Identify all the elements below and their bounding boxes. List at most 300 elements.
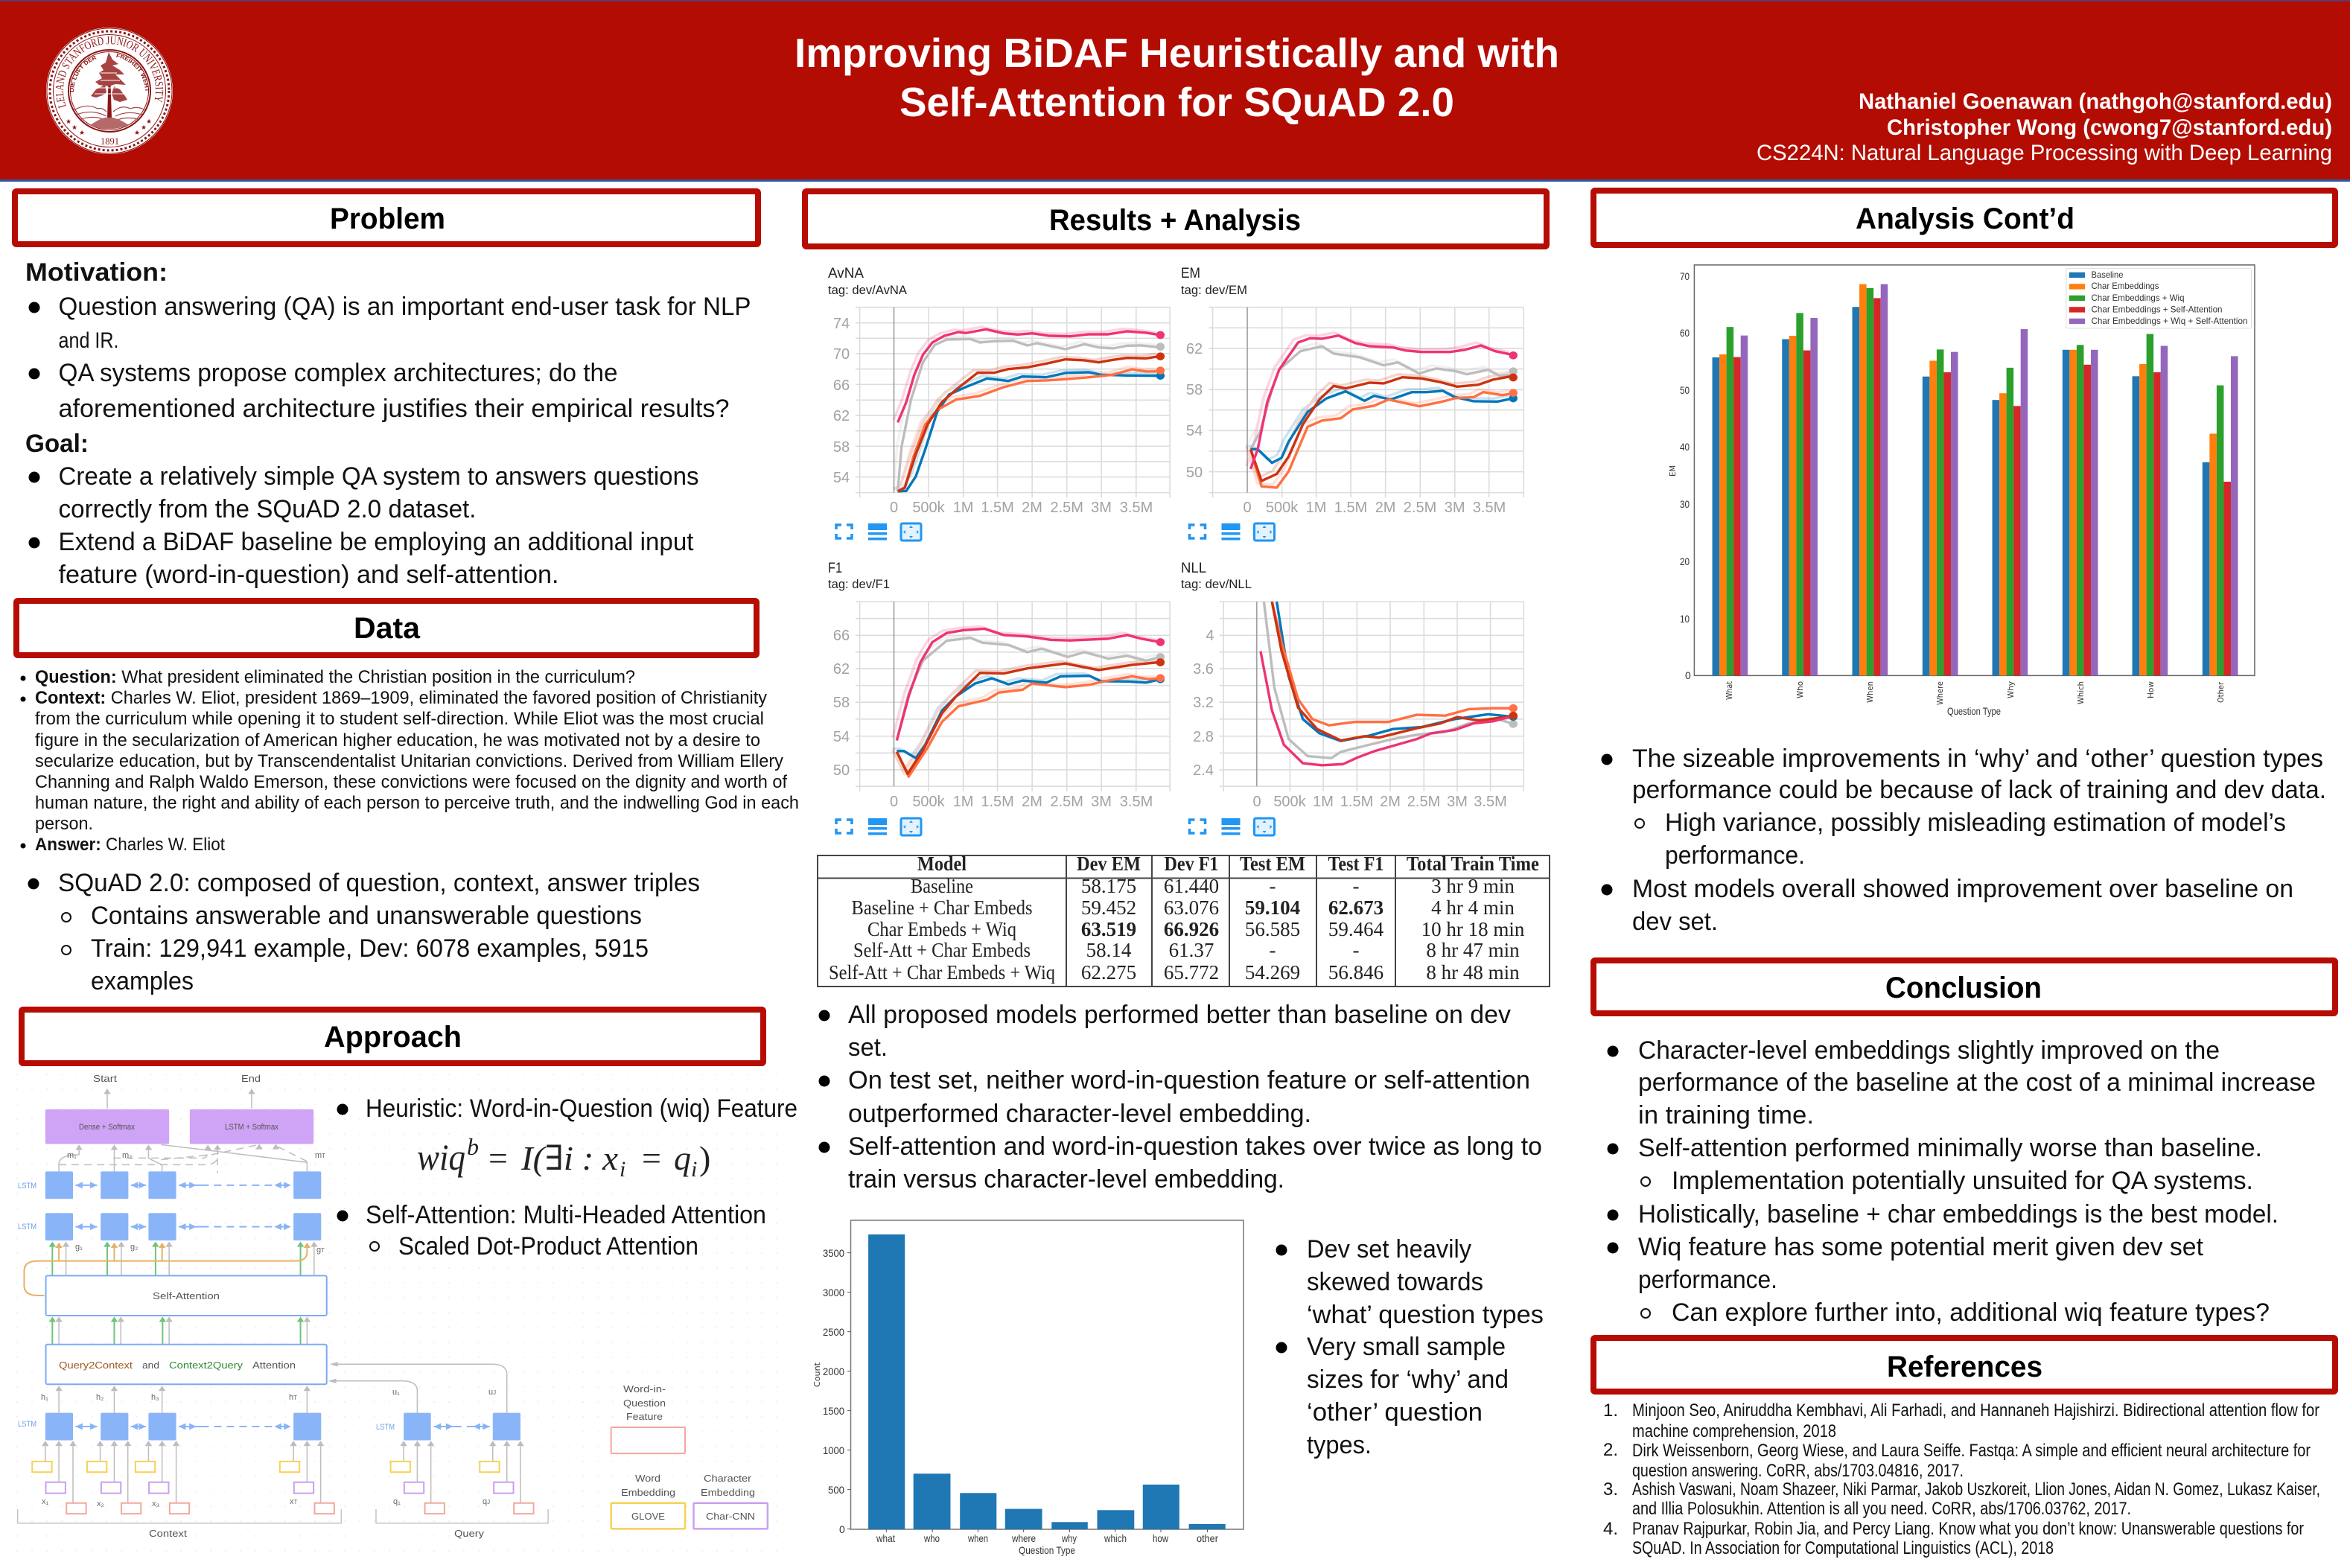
grouped bar chart: EM by question type: 10 — [1680, 613, 1690, 625]
diagram labels: h₃ — [151, 1393, 159, 1402]
text: conclusion bullets: performance. — [1638, 1266, 1777, 1294]
table: model results: Dev F1 — [1165, 852, 1218, 875]
bar chart: question type counts: 1500 — [823, 1405, 844, 1417]
panel: results and analysis — [805, 191, 1550, 1556]
bar chart: question type counts: who — [923, 1532, 940, 1544]
text: SQuAD description — [28, 869, 700, 995]
table: model results: Total Train Time — [1407, 852, 1539, 875]
diagram labels: uJ — [488, 1388, 496, 1397]
grouped bar chart: EM by question type: Where — [1935, 681, 1945, 705]
diagram labels: m₁ — [67, 1151, 77, 1160]
text: example question context answer: figure in the secularization of American higher education, he was motivated not by a desire to — [35, 730, 760, 750]
line chart: EM: 3.5M — [1473, 500, 1506, 516]
diagram labels: hT — [289, 1393, 297, 1402]
text: analysis bullets: The sizeable improvements in ‘why’ and ‘other’ question types — [1632, 745, 2323, 773]
text: results bullets: set. — [848, 1033, 888, 1062]
text: example question context answer: human nature, the right and ability of each person to perceive truth, and the indwelling God in each — [35, 793, 799, 813]
diagram labels: q₁ — [393, 1497, 401, 1506]
heading: Results + Analysis: Results + Analysis — [1049, 204, 1301, 237]
icon: Stanford seal: ★ — [134, 129, 140, 136]
text: analysis bullets: dev set. — [1632, 908, 1718, 936]
title — [795, 30, 1559, 125]
line chart: EM: 50 — [1186, 465, 1203, 481]
line chart: NLL: 1.5M — [1340, 794, 1373, 810]
diagram labels: LSTM — [18, 1223, 36, 1231]
diagram labels: x₂ — [97, 1500, 104, 1508]
diagram labels: Question — [623, 1398, 666, 1409]
diagram labels: u₁ — [392, 1388, 400, 1397]
heading: Conclusion: Conclusion — [1885, 972, 2042, 1004]
line chart: F1: 1.5M — [981, 794, 1014, 810]
icons: F1 chart controls — [836, 818, 921, 835]
line chart: F1: 1M — [953, 794, 973, 810]
table: model results: - — [1269, 939, 1276, 961]
icon: Stanford seal: LELAND STANFORD JUNIOR UNIVERSITY — [55, 36, 164, 109]
text: reference list: SQuAD. In Association for Computational Linguistics (ACL), 2018 — [1632, 1538, 2054, 1558]
diagram labels: g₂ — [130, 1243, 138, 1252]
diagram labels: Embedding — [621, 1487, 675, 1498]
table: model results: 59.104 — [1245, 896, 1300, 919]
diagram labels: LSTM + Softmax — [225, 1123, 278, 1132]
table: model results: Self-Att + Char Embeds — [853, 939, 1031, 961]
icon: Stanford seal: DIE LUFT DER — [70, 56, 97, 92]
line chart: EM: 1.5M — [1334, 500, 1367, 516]
text: conclusion bullets: in training time. — [1638, 1101, 1814, 1129]
line chart: F1: 66 — [833, 628, 850, 644]
line chart: AvNA: 66 — [833, 377, 850, 394]
text: conclusion bullets: performance of the baseline at the cost of a minimal increase — [1638, 1068, 2316, 1097]
icons: AvNA chart controls — [836, 523, 921, 541]
text: motivation and goal: correctly from the SQuAD 2.0 dataset. — [58, 495, 477, 523]
table: model results: - — [1269, 875, 1276, 897]
line chart: NLL: 3.2 — [1193, 695, 1214, 711]
heading: Approach — [22, 1010, 763, 1063]
panel: data — [16, 601, 799, 995]
panel: analysis continued — [1593, 191, 2335, 936]
grouped bar chart: EM by question type: 30 — [1680, 498, 1690, 510]
bar chart: question type counts: 3500 — [823, 1247, 844, 1259]
formula: word in question — [417, 1133, 710, 1182]
bar chart: question type counts: what — [876, 1532, 895, 1544]
line chart: F1: 2M — [1022, 794, 1042, 810]
diagram labels: Context2Query — [169, 1360, 243, 1371]
line chart: NLL: 3.5M — [1474, 794, 1507, 810]
line chart: F1: 3M — [1091, 794, 1112, 810]
table: model results: 66.926 — [1164, 918, 1219, 940]
text: motivation and goal: QA systems propose complex architectures; do the — [58, 359, 618, 387]
diagram labels: Dense + Softmax — [79, 1123, 135, 1132]
line chart: AvNA: 70 — [833, 346, 850, 363]
diagram labels: Attention — [252, 1360, 296, 1371]
diagram labels: g₁ — [75, 1243, 83, 1252]
line chart: AvNA: 3.5M — [1120, 500, 1153, 516]
line chart: NLL: NLL — [1181, 561, 1206, 576]
bar chart: question type counts: where — [1011, 1532, 1036, 1544]
bar chart: question type counts: how — [1153, 1532, 1169, 1544]
formula: word in question: wiq — [417, 1136, 465, 1178]
text: motivation and goal: Extend a BiDAF baseline be employing an additional input — [58, 528, 694, 556]
text: conclusion bullets: Character-level embeddings slightly improved on the — [1638, 1036, 2220, 1065]
line chart: NLL: 4 — [1206, 628, 1214, 644]
line chart: F1: 50 — [833, 762, 850, 779]
text: reference list: and Illia Polosukhin. Attention is all you need. CoRR, abs/1706.03762, 2017. — [1632, 1499, 2131, 1519]
formula: word in question: I(∃i : x — [520, 1139, 619, 1177]
icon: Stanford seal: ★ — [146, 118, 152, 125]
text: dev set bullets: Very small sample — [1307, 1333, 1506, 1361]
line chart: EM: 500k — [1266, 500, 1299, 516]
text: conclusion bullets — [1607, 1036, 2316, 1327]
table: model results: 8 hr 48 min — [1426, 961, 1520, 984]
table: model results: 8 hr 47 min — [1426, 939, 1520, 961]
table: model results: Self-Att + Char Embeds + Wiq — [829, 961, 1055, 984]
text: SQuAD description: Train: 129,941 example, Dev: 6078 examples, 5915 — [91, 934, 649, 963]
text: motivation and goal — [25, 258, 751, 589]
line chart: EM: tag: dev/EM — [1181, 283, 1247, 297]
line chart: F1: 0 — [890, 794, 898, 810]
diagram labels: LSTM — [18, 1420, 36, 1429]
table: model results: 58.175 — [1081, 875, 1136, 897]
text: example question context answer: Channing and Ralph Waldo Emerson, these convictions were focused on the dignity and worth of — [35, 772, 787, 792]
formula: word in question: q — [674, 1139, 691, 1177]
diagram labels: and — [142, 1360, 159, 1371]
formula: word in question: i — [620, 1157, 625, 1182]
table: model results: - — [1352, 875, 1360, 897]
diagram labels: Self-Attention — [153, 1290, 220, 1301]
diagram labels: xT — [290, 1497, 298, 1506]
line chart: AvNA: 58 — [833, 439, 850, 456]
table: model results: 62.275 — [1081, 961, 1136, 984]
bar chart: question type counts — [812, 1220, 1244, 1556]
diagram labels: End — [241, 1073, 261, 1084]
text: results bullets: On test set, neither word-in-question feature or self-attention — [848, 1066, 1530, 1094]
formula: word in question: = — [488, 1139, 508, 1177]
text: example question context answer: secularize education, but by Transcendentalist Unitarian convictions. Derived from William Ellery — [35, 751, 783, 771]
table: model results: 4 hr 4 min — [1431, 896, 1515, 919]
bar chart: question type counts: 2500 — [823, 1326, 844, 1338]
diagram labels: Word — [635, 1473, 660, 1484]
icons: NLL chart controls — [1190, 818, 1275, 835]
icon: Stanford seal: ★ — [66, 118, 71, 125]
text: motivation and goal: Goal: — [25, 430, 89, 458]
text: conclusion bullets: Holistically, baseline + char embeddings is the best model. — [1638, 1200, 2279, 1228]
grouped bar chart: EM by question type: Char Embeddings — [2091, 281, 2159, 291]
table: model results: 62.673 — [1328, 896, 1383, 919]
grouped bar chart: EM by question type: Other — [2216, 682, 2226, 703]
bar chart: question type counts: when — [967, 1532, 988, 1544]
heading: Problem: Problem — [330, 203, 445, 235]
text: reference list: 2. — [1603, 1440, 1618, 1460]
table: model results: 59.452 — [1081, 896, 1136, 919]
title: Self-Attention for SQuAD 2.0 — [899, 79, 1454, 125]
panel: problem — [15, 191, 758, 589]
text: dev set bullets: Dev set heavily — [1307, 1235, 1471, 1263]
table: model results: Test EM — [1240, 852, 1305, 875]
grouped bar chart: EM by question type: Which — [2076, 681, 2086, 704]
diagram labels: gT — [316, 1246, 325, 1255]
text: self-attention bullets: Scaled Dot-Product Attention — [398, 1232, 698, 1261]
text: example question context answer: Answer: Charles W. Eliot — [35, 835, 225, 855]
table: model results: 63.519 — [1081, 918, 1136, 940]
heading: Analysis Cont'd — [1593, 191, 2335, 245]
diagram labels: x₁ — [42, 1497, 49, 1506]
icon: Stanford seal — [46, 28, 173, 154]
grouped bar chart: EM by question type: 60 — [1680, 327, 1690, 339]
text: dev set bullets — [1276, 1235, 1544, 1459]
text: analysis bullets — [1601, 745, 2326, 936]
grouped bar chart: EM by question type: Why — [2006, 681, 2016, 698]
line chart: AvNA: 3M — [1091, 500, 1112, 516]
line chart: AvNA: 2M — [1022, 500, 1042, 516]
line chart: EM: 54 — [1186, 423, 1203, 439]
line chart: F1: 62 — [833, 661, 850, 678]
text: results bullets: Self-attention and word-in-question takes over twice as long to — [848, 1132, 1542, 1161]
heading: Conclusion — [1593, 960, 2335, 1013]
bar chart: question type counts: Count — [812, 1362, 822, 1387]
table: model results: 63.076 — [1164, 896, 1219, 919]
icon: Stanford seal: ★ — [71, 124, 77, 131]
text: reference list: 4. — [1603, 1519, 1618, 1539]
line chart: NLL: 2.8 — [1193, 729, 1214, 745]
diagram labels: Query2Context — [59, 1360, 133, 1371]
line chart: NLL: tag: dev/NLL — [1181, 577, 1252, 591]
bar chart: question type counts: 3000 — [823, 1287, 844, 1298]
grouped bar chart: EM by question type: Char Embeddings + Self-Attention — [2091, 304, 2222, 314]
text: example question context answer: Question: What president eliminated the Christian position in the curriculum? — [35, 667, 635, 687]
formula: word in question: b — [467, 1133, 479, 1160]
icon: Stanford seal: 1891 — [101, 136, 119, 147]
line chart: NLL: 0 — [1252, 794, 1261, 810]
diagram labels: m₂ — [122, 1151, 132, 1160]
line chart: NLL: 500k — [1273, 794, 1307, 810]
text: reference list: question answering. CoRR, abs/1703.04816, 2017. — [1632, 1461, 1964, 1481]
grouped bar chart: EM by question type: Who — [1795, 681, 1805, 698]
line chart: EM: EM — [1181, 266, 1200, 281]
text: conclusion bullets: Wiq feature has some potential merit given dev set — [1638, 1233, 2204, 1261]
grouped bar chart: EM by question type: Baseline — [2091, 270, 2124, 280]
table: model results: 10 hr 18 min — [1421, 918, 1525, 940]
text: results bullets: train versus character-level embedding. — [848, 1165, 1284, 1193]
icons: EM chart controls — [1190, 523, 1275, 541]
panel: conclusion — [1593, 960, 2335, 1327]
heading: Data — [16, 601, 757, 655]
line chart: EM: 62 — [1186, 341, 1203, 357]
table: model results: Baseline + Char Embeds — [852, 896, 1032, 919]
text: conclusion bullets: Self-attention performed minimally worse than baseline. — [1638, 1134, 2262, 1162]
diagram labels: GLOVE — [631, 1511, 665, 1522]
diagram labels: Context — [149, 1528, 187, 1539]
diagram labels: x₃ — [152, 1500, 159, 1508]
heading: Data: Data — [354, 612, 421, 645]
diagram labels — [18, 1073, 755, 1539]
bar chart: question type counts: which — [1104, 1532, 1127, 1544]
text: motivation and goal: Motivation: — [25, 258, 168, 287]
text: results bullets: All proposed models performed better than baseline on dev — [848, 1001, 1511, 1029]
line chart: NLL: 2.4 — [1193, 762, 1214, 779]
line chart: AvNA: tag: dev/AvNA — [828, 283, 908, 297]
authors and course: Christopher Wong (cwong7@stanford.edu) — [1887, 115, 2332, 140]
diagram labels: h₁ — [41, 1393, 48, 1402]
table: model results: Dev EM — [1077, 852, 1141, 875]
line chart: F1: 58 — [833, 695, 850, 711]
heading: Results + Analysis — [805, 191, 1547, 246]
line chart: F1: 3.5M — [1120, 794, 1153, 810]
text: reference list — [1603, 1400, 2320, 1558]
bar chart: question type counts: 1000 — [823, 1444, 844, 1456]
authors and course: Nathaniel Goenawan (nathgoh@stanford.edu) — [1859, 89, 2332, 114]
line chart: EM — [1181, 266, 1523, 516]
text: motivation and goal: aforementioned architecture justifies their empirical results? — [58, 395, 730, 423]
line chart: AvNA: 0 — [890, 500, 898, 516]
grouped bar chart: EM by question type: Char Embeddings + Wiq + Self-Attention — [2091, 316, 2247, 326]
line chart: AvNA: 74 — [833, 316, 850, 332]
grouped bar chart: EM by question type — [1668, 265, 2255, 717]
text: results bullets — [819, 1001, 1542, 1193]
table: model results: 56.585 — [1245, 918, 1300, 940]
text: dev set bullets: ‘other’ question — [1307, 1398, 1483, 1427]
title: Improving BiDAF Heuristically and with — [795, 30, 1559, 76]
text: dev set bullets: sizes for ‘why’ and — [1307, 1365, 1509, 1394]
icon: Stanford seal: ★ — [79, 129, 85, 136]
text: conclusion bullets: Implementation potentially unsuited for QA systems. — [1672, 1167, 2253, 1195]
text: motivation and goal: feature (word-in-question) and self-attention. — [58, 561, 558, 589]
text: self-attention bullets — [337, 1201, 766, 1261]
heading: References — [1593, 1338, 2335, 1392]
authors and course: CS224N: Natural Language Processing with Deep Learning — [1757, 141, 2332, 165]
text: reference list: 3. — [1603, 1479, 1618, 1500]
table: model results: 61.440 — [1164, 875, 1219, 897]
line chart: EM: 2.5M — [1404, 500, 1436, 516]
diagram labels: Query — [454, 1528, 485, 1539]
bar chart: question type counts: Question Type — [1019, 1544, 1075, 1556]
text: motivation and goal: and IR. — [58, 328, 119, 353]
text: analysis bullets: Most models overall showed improvement over baseline on — [1632, 875, 2293, 903]
text: motivation and goal: Create a relatively simple QA system to answers questions — [58, 462, 698, 491]
formula: word in question: ) — [699, 1139, 710, 1177]
formula: word in question: i — [691, 1157, 697, 1182]
text: dev set bullets: skewed towards — [1307, 1268, 1483, 1296]
table: model results: 56.846 — [1328, 961, 1383, 984]
line chart: EM: 0 — [1243, 500, 1252, 516]
heading: Analysis Cont'd: Analysis Cont’d — [1856, 203, 2074, 235]
diagram labels: mT — [315, 1151, 325, 1160]
diagram labels: Feature — [626, 1411, 663, 1422]
architecture diagram — [18, 1073, 797, 1539]
table: model results: Model — [917, 852, 967, 875]
line chart: NLL: 2.5M — [1407, 794, 1440, 810]
line chart: NLL: 2M — [1380, 794, 1401, 810]
line chart: NLL — [1181, 561, 1523, 810]
diagram labels: Word-in- — [623, 1383, 666, 1395]
heading: References: References — [1887, 1351, 2042, 1383]
text: SQuAD description: SQuAD 2.0: composed of question, context, answer triples — [58, 869, 700, 897]
line chart: AvNA — [828, 266, 1170, 516]
text: SQuAD description: examples — [91, 967, 194, 995]
text: analysis bullets: performance could be because of lack of training and dev data. — [1632, 776, 2326, 804]
panel: references — [1593, 1338, 2335, 1558]
diagram labels: Embedding — [701, 1487, 755, 1498]
grouped bar chart: EM by question type: 70 — [1680, 270, 1690, 282]
grouped bar chart: EM by question type: 40 — [1680, 441, 1690, 453]
line chart: F1: 500k — [912, 794, 946, 810]
grouped bar chart: EM by question type: EM — [1668, 465, 1678, 477]
line chart: F1 — [828, 561, 1170, 810]
line chart: AvNA: 54 — [833, 470, 850, 486]
table: model results: 59.464 — [1328, 918, 1384, 940]
table: model results: Baseline — [911, 875, 973, 897]
line chart: EM: 2M — [1375, 500, 1395, 516]
line chart: EM: 1M — [1306, 500, 1326, 516]
text: example question context answer: from the curriculum while opening it to student self-direction. While Eliot was the most crucial — [35, 709, 764, 729]
diagram labels: h₂ — [96, 1393, 104, 1402]
line chart: AvNA: 1.5M — [981, 500, 1014, 516]
text: results bullets: outperformed character-level embedding. — [848, 1100, 1311, 1128]
line chart: F1: 2.5M — [1050, 794, 1083, 810]
grouped bar chart: EM by question type: Char Embeddings + Wiq — [2091, 293, 2185, 303]
line chart: EM: 3M — [1445, 500, 1465, 516]
line chart: AvNA: 500k — [912, 500, 946, 516]
grouped bar chart: EM by question type: What — [1725, 681, 1734, 700]
header banner — [0, 0, 2350, 182]
table: model results: 3 hr 9 min — [1431, 875, 1515, 897]
text: dev set bullets: types. — [1307, 1431, 1372, 1459]
icon: Stanford seal: FREIHEIT WEHT — [116, 54, 149, 92]
line chart: AvNA: 1M — [953, 500, 973, 516]
table: model results: Test F1 — [1328, 852, 1383, 875]
grouped bar chart: EM by question type: 0 — [1685, 669, 1691, 681]
line chart: AvNA: 62 — [833, 408, 850, 424]
diagram labels: Start — [93, 1073, 117, 1084]
line chart: F1: 54 — [833, 729, 850, 745]
table: model results: 58.14 — [1086, 939, 1132, 961]
table: model results: 61.37 — [1169, 939, 1214, 961]
text: example question context answer: person. — [35, 814, 93, 834]
table: model results: 65.772 — [1164, 961, 1219, 984]
text: example question context answer: Context: Charles W. Eliot, president 1869–1909, eliminated the favored position of Christianity — [35, 688, 767, 708]
text: example question context answer — [21, 667, 799, 855]
diagram labels: Char-CNN — [706, 1511, 755, 1522]
line chart: F1: tag: dev/F1 — [828, 577, 890, 591]
heading: Problem — [15, 191, 758, 244]
text: conclusion bullets: Can explore further into, additional wiq feature types? — [1672, 1298, 2270, 1327]
heading: Approach: Approach — [324, 1021, 462, 1054]
bar chart: question type counts: 2000 — [823, 1365, 844, 1377]
grouped bar chart: EM by question type: 20 — [1680, 555, 1690, 567]
line chart: NLL: 3.6 — [1193, 661, 1214, 678]
grouped bar chart: EM by question type: Question Type — [1947, 705, 2001, 717]
text: SQuAD description: Contains answerable and unanswerable questions — [91, 902, 642, 930]
text: reference list: machine comprehension, 2018 — [1632, 1421, 1836, 1441]
line chart: AvNA: 2.5M — [1050, 500, 1083, 516]
text: dev set bullets: ‘what’ question types — [1307, 1301, 1544, 1329]
table: model results: - — [1352, 939, 1360, 961]
text: motivation and goal: Question answering (QA) is an important end-user task for NLP — [58, 293, 751, 321]
text: analysis bullets: High variance, possibly misleading estimation of model’s — [1665, 809, 2286, 837]
text: analysis bullets: performance. — [1665, 841, 1805, 870]
icon: Stanford seal: ★ — [141, 124, 147, 131]
grouped bar chart: EM by question type: When — [1865, 681, 1875, 703]
line chart: NLL: 3M — [1447, 794, 1468, 810]
line chart: AvNA: AvNA — [828, 266, 864, 281]
formula: word in question: = — [642, 1139, 661, 1177]
grouped bar chart: EM by question type: How — [2146, 681, 2156, 698]
line chart: F1: F1 — [828, 561, 842, 576]
bar chart: question type counts: 500 — [828, 1484, 844, 1496]
text: heuristic bullet: Heuristic: Word-in-Question (wiq) Feature — [366, 1094, 797, 1123]
line chart: NLL: 1M — [1313, 794, 1334, 810]
diagram labels: LSTM — [376, 1423, 395, 1432]
text: self-attention bullets: Self-Attention: Multi-Headed Attention — [366, 1201, 766, 1229]
text: reference list: 1. — [1603, 1400, 1618, 1421]
